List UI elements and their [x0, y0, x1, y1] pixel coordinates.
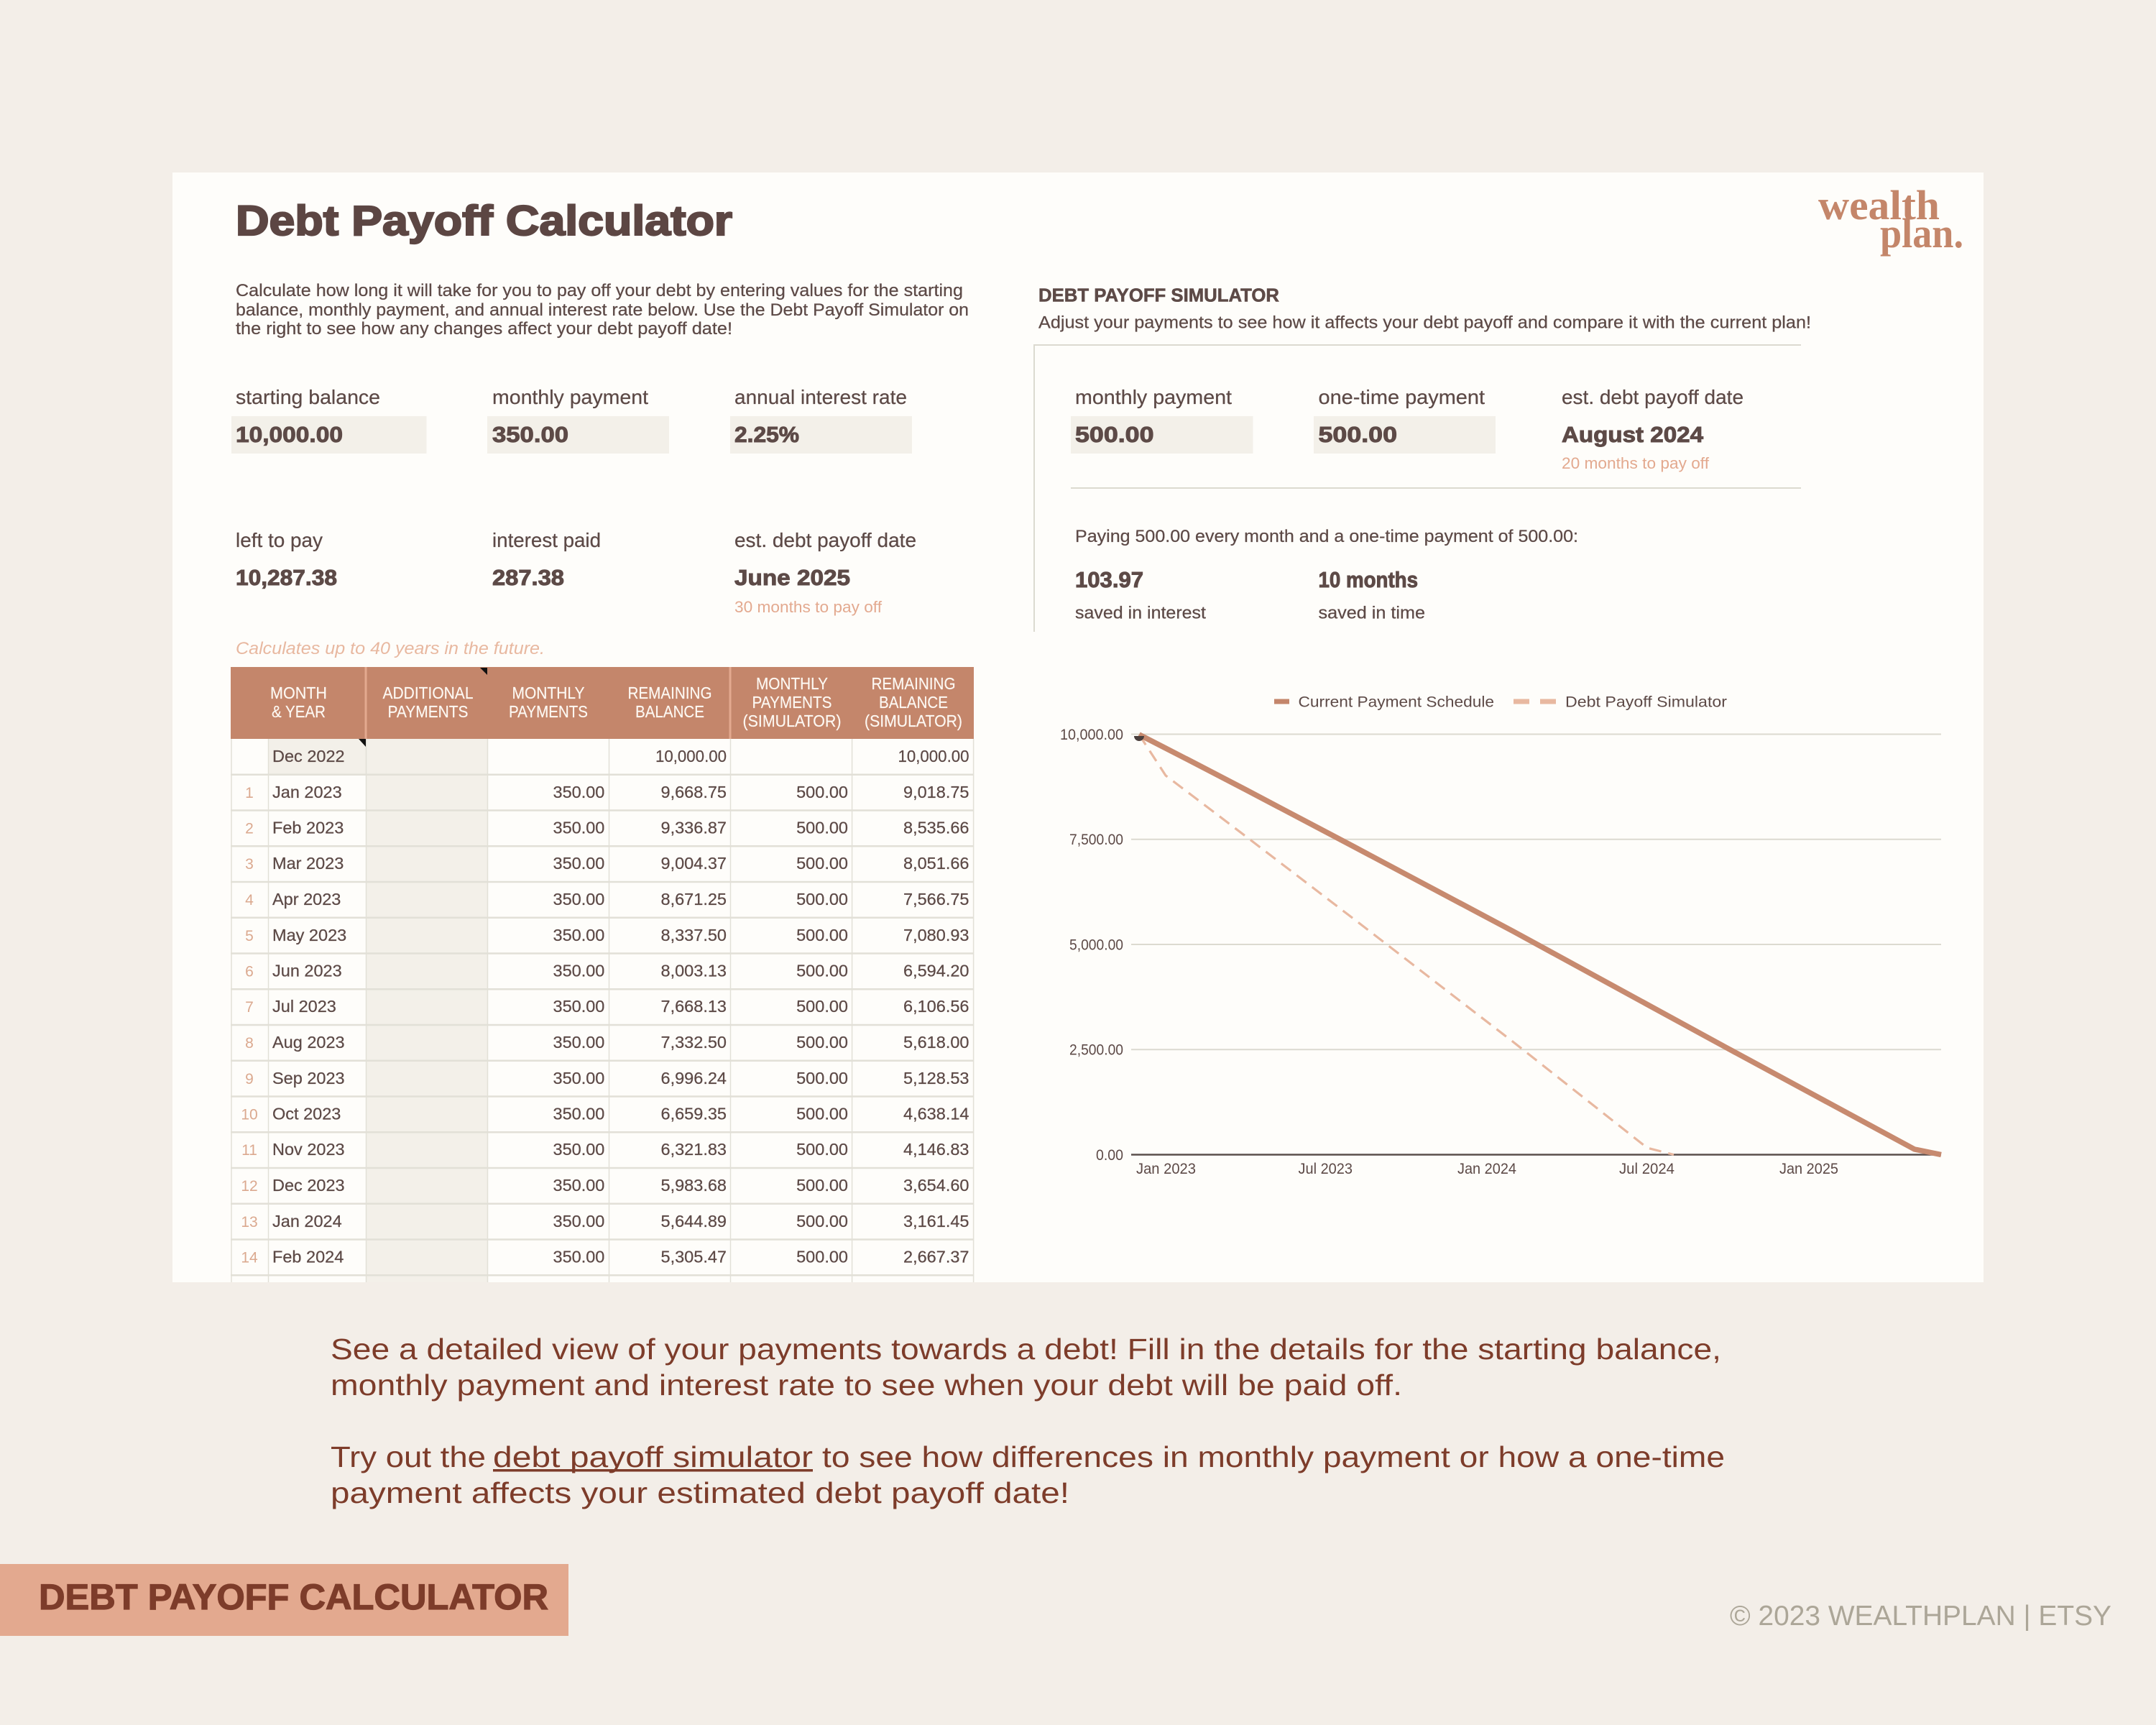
- chart legend: [1274, 694, 1727, 710]
- table header: ADDITIONAL: [382, 684, 474, 702]
- stat: est. debt payoff date: est. debt payoff date: [734, 529, 916, 551]
- table rows: Mar 2023: [272, 854, 344, 873]
- line: debt payoff simulator: [1139, 735, 1674, 1154]
- copyright: © 2023 WEALTHPLAN | ETSY: [1730, 1601, 2111, 1632]
- table rows: 5,618.00: [903, 1033, 969, 1052]
- table rows: 350.00: [553, 1069, 604, 1087]
- logo: wealth plan: wealth: [1818, 182, 1940, 229]
- input: one-time payment: 500.00: [1318, 422, 1397, 447]
- table rows: 500.00: [796, 1248, 848, 1266]
- x axis labels: Jan 2025: [1779, 1161, 1838, 1177]
- table header: BALANCE: [879, 693, 948, 712]
- table rows: 500.00: [796, 1212, 848, 1230]
- y axis labels: 0.00: [1096, 1147, 1123, 1164]
- input: simulator monthly payment: 500.00: [1075, 422, 1154, 447]
- table rows: 500.00: [796, 1176, 848, 1195]
- table rows: 3,161.45: [903, 1212, 969, 1230]
- table rows: 350.00: [553, 962, 604, 980]
- table header: REMAINING: [628, 684, 711, 702]
- input: one-time payment: one-time payment: [1318, 386, 1485, 408]
- table rows: 350.00: [553, 997, 604, 1016]
- logo: wealth plan: plan.: [1880, 210, 1963, 257]
- line chart: payoff schedule: [1060, 694, 1941, 1177]
- table rows: 3,654.60: [903, 1176, 969, 1195]
- table rows: 9,004.37: [661, 854, 727, 873]
- stat: simulator payoff date: August 2024: [1562, 422, 1704, 447]
- table rows: Jun 2023: [272, 962, 342, 980]
- simulator heading: DEBT PAYOFF SIMULATOR: [1038, 285, 1279, 306]
- note markers: [359, 668, 487, 747]
- table rows: 4,638.14: [903, 1104, 969, 1123]
- table rows: 500.00: [796, 1069, 848, 1087]
- table rows: 500.00: [796, 997, 848, 1016]
- table rows: 500.00: [796, 1033, 848, 1052]
- table rows: Oct 2023: [272, 1104, 341, 1123]
- badge: debt payoff calculator: [0, 1564, 568, 1636]
- description text: Calculate how long it will take for you to pay off your debt by entering values for the starting: [236, 281, 963, 300]
- x axis labels: Jan 2023: [1136, 1161, 1196, 1177]
- input: monthly payment: 350.00: [492, 422, 568, 447]
- stat: est. debt payoff date: 30 months to pay off: [734, 598, 883, 616]
- description text: the right to see how any changes affect your debt payoff date!: [236, 319, 732, 339]
- y axis labels: 5,000.00: [1069, 937, 1123, 953]
- input: annual interest rate: annual interest rate: [734, 386, 907, 408]
- table rows: 6,321.83: [661, 1140, 727, 1159]
- table rows: 9: [245, 1071, 254, 1087]
- x axis labels: Jul 2024: [1619, 1161, 1674, 1177]
- table rows: 3: [245, 856, 254, 873]
- table header: PAYMENTS: [388, 702, 469, 721]
- table rows: 9,668.75: [661, 783, 727, 801]
- stat: est. debt payoff date: June 2025: [734, 565, 850, 590]
- table rows: 350.00: [553, 818, 604, 837]
- table rows: 350.00: [553, 1176, 604, 1195]
- stat: simulator payoff date: [1562, 386, 1743, 472]
- table rows: 500.00: [796, 926, 848, 944]
- payment schedule table: [231, 667, 974, 1282]
- table rows: 5,305.47: [661, 1248, 727, 1266]
- table rows: Sep 2023: [272, 1069, 345, 1087]
- stat: interest paid: [492, 529, 601, 590]
- table rows: 6,996.24: [661, 1069, 727, 1087]
- table rows: 6,594.20: [903, 962, 969, 980]
- table rows: 5,644.89: [661, 1212, 727, 1230]
- y axis labels: [1060, 727, 1123, 1164]
- table rows: 5: [245, 928, 254, 944]
- table rows: 350.00: [553, 854, 604, 873]
- table rows: Apr 2023: [272, 890, 341, 908]
- input: starting balance: [231, 386, 427, 454]
- logo: wealth plan: [1818, 182, 1963, 257]
- table header: MONTH: [270, 684, 327, 702]
- table rows: Jan 2024: [272, 1212, 342, 1230]
- table rows: 4,146.83: [903, 1140, 969, 1159]
- table rows: 9,018.75: [903, 783, 969, 801]
- table rows: 500.00: [796, 854, 848, 873]
- stat: left to pay: 10,287.38: [236, 565, 337, 590]
- simulator heading: [1038, 285, 1811, 332]
- panel: spreadsheet: [172, 172, 1984, 1282]
- input: simulator monthly payment: monthly payment: [1075, 386, 1232, 408]
- table rows: 350.00: [553, 1033, 604, 1052]
- stat: simulator payoff date: 20 months to pay off: [1562, 454, 1710, 472]
- description text: [236, 281, 969, 339]
- y axis labels: 2,500.00: [1069, 1042, 1123, 1058]
- x axis labels: [1136, 1161, 1838, 1177]
- table rows: 8: [245, 1035, 254, 1052]
- stat: interest paid: interest paid: [492, 529, 601, 551]
- body text: paragraph two: to see how differences in monthly payment or how a one-time: [822, 1440, 1725, 1473]
- table rows: 8,671.25: [661, 890, 727, 908]
- note: calculates up to 40 years: Calculates up to 40 years in the future.: [236, 639, 545, 658]
- table header: PAYMENTS: [509, 702, 588, 721]
- table rows: 10,000.00: [655, 747, 727, 765]
- chart legend: Current Payment Schedule: [1298, 694, 1494, 710]
- title: Debt Payoff Calculator: [236, 198, 732, 244]
- body text: paragraph one: monthly payment and interest rate to see when your debt will be paid off.: [331, 1368, 1402, 1402]
- table rows: 1: [245, 785, 254, 801]
- table rows: 11: [241, 1142, 257, 1159]
- table rows: Jan 2023: [272, 783, 342, 801]
- stat: est. debt payoff date: [734, 529, 916, 616]
- table header: (SIMULATOR): [743, 712, 841, 730]
- stat: left to pay: left to pay: [236, 529, 323, 551]
- table header: PAYMENTS: [752, 693, 832, 712]
- table rows: 500.00: [796, 890, 848, 908]
- stat: saved in interest: saved in interest: [1075, 604, 1206, 622]
- body text: paragraph two: payment affects your estimated debt payoff date!: [331, 1476, 1069, 1509]
- table rows: 8,003.13: [661, 962, 727, 980]
- input: starting balance: starting balance: [236, 386, 380, 408]
- table rows: 4: [245, 892, 254, 908]
- input: annual interest rate: 2.25%: [734, 422, 799, 447]
- table rows: 350.00: [553, 1212, 604, 1230]
- table rows: 500.00: [796, 1140, 848, 1159]
- table rows: 350.00: [553, 1104, 604, 1123]
- table rows: Jul 2023: [272, 997, 336, 1016]
- table rows: 6,106.56: [903, 997, 969, 1016]
- table rows: 350.00: [553, 783, 604, 801]
- body text: paragraph one: [331, 1333, 1721, 1402]
- input: monthly payment: [487, 386, 669, 454]
- table rows: 8,337.50: [661, 926, 727, 944]
- table rows: 7,668.13: [661, 997, 727, 1016]
- table rows: 6,659.35: [661, 1104, 727, 1123]
- table rows: 7,332.50: [661, 1033, 727, 1052]
- start point marker: [1134, 736, 1144, 741]
- stat: saved in time: 10 months: [1318, 567, 1418, 592]
- table rows: 500.00: [796, 783, 848, 801]
- table rows: 2,667.37: [903, 1248, 969, 1266]
- body text: paragraph two: [331, 1440, 1725, 1509]
- table rows: [241, 747, 969, 1266]
- badge: debt payoff calculator: DEBT PAYOFF CALCULATOR: [39, 1577, 548, 1617]
- table rows: Nov 2023: [272, 1140, 345, 1159]
- input: monthly payment: monthly payment: [492, 386, 648, 408]
- table rows: 500.00: [796, 962, 848, 980]
- table rows: 13: [241, 1214, 258, 1230]
- table rows: 350.00: [553, 890, 604, 908]
- table rows: 500.00: [796, 818, 848, 837]
- body text: paragraph two: Try out the: [331, 1440, 486, 1473]
- table rows: 6: [245, 963, 254, 980]
- table rows: 8,051.66: [903, 854, 969, 873]
- table rows: Dec 2022: [272, 747, 345, 765]
- table shaded cells: [269, 739, 487, 1282]
- simulator heading: Adjust your payments to see how it affects your debt payoff and compare it with the current plan!: [1038, 313, 1811, 332]
- table rows: 5,983.68: [661, 1176, 727, 1195]
- table header: REMAINING: [871, 674, 956, 693]
- table rows: Feb 2024: [272, 1248, 344, 1266]
- table header: BALANCE: [635, 702, 704, 721]
- panel: debt payoff simulator: [1034, 345, 1801, 632]
- table rows: 14: [241, 1249, 258, 1266]
- table rows: 9,336.87: [661, 818, 727, 837]
- x axis labels: Jul 2023: [1298, 1161, 1353, 1177]
- table header: & YEAR: [272, 702, 326, 721]
- table header: MONTHLY: [512, 684, 585, 702]
- input: simulator monthly payment: [1071, 386, 1253, 454]
- body text: paragraph two: debt payoff simulator: [493, 1440, 813, 1473]
- y axis labels: 10,000.00: [1060, 727, 1123, 743]
- table rows: Feb 2023: [272, 818, 344, 837]
- line: current payment schedule: [1139, 735, 1941, 1154]
- stat: left to pay: [236, 529, 337, 590]
- x axis labels: Jan 2024: [1457, 1161, 1516, 1177]
- table rows: 7: [245, 999, 254, 1016]
- stat: interest paid: 287.38: [492, 565, 564, 590]
- table rows: Aug 2023: [272, 1033, 345, 1052]
- table rows: 350.00: [553, 1248, 604, 1266]
- stat: saved in interest: 103.97: [1075, 567, 1143, 592]
- table rows: 350.00: [553, 926, 604, 944]
- input: one-time payment: [1314, 386, 1496, 454]
- simulator summary sentence: Paying 500.00 every month and a one-time payment of 500.00:: [1075, 527, 1578, 546]
- stat: saved in time: saved in time: [1318, 604, 1425, 622]
- table header: [231, 667, 974, 739]
- table header: (SIMULATOR): [865, 712, 962, 730]
- table rows: 2: [245, 821, 254, 837]
- table rows: 8,535.66: [903, 818, 969, 837]
- table rows: 10,000.00: [898, 747, 969, 765]
- table rows: 7,080.93: [903, 926, 969, 944]
- table rows: 350.00: [553, 1140, 604, 1159]
- stat: saved in time: [1318, 567, 1425, 622]
- input: annual interest rate: [730, 386, 912, 454]
- table rows: Dec 2023: [272, 1176, 345, 1195]
- chart legend: Debt Payoff Simulator: [1565, 694, 1727, 710]
- table rows: May 2023: [272, 926, 346, 944]
- body text: paragraph one: See a detailed view of your payments towards a debt! Fill in the details for the starting balance,: [331, 1333, 1721, 1366]
- stat: saved in interest: [1075, 567, 1206, 622]
- input: starting balance: 10,000.00: [236, 422, 343, 447]
- description text: balance, monthly payment, and annual interest rate below. Use the Debt Payoff Simulator on: [236, 300, 969, 320]
- stat: simulator payoff date: est. debt payoff date: [1562, 386, 1743, 408]
- y axis labels: 7,500.00: [1069, 832, 1123, 848]
- table rows: 7,566.75: [903, 890, 969, 908]
- table header: MONTHLY: [756, 674, 828, 693]
- table rows: 5,128.53: [903, 1069, 969, 1087]
- table rows: 500.00: [796, 1104, 848, 1123]
- table rows: 10: [241, 1107, 258, 1123]
- table rows: 12: [241, 1178, 258, 1195]
